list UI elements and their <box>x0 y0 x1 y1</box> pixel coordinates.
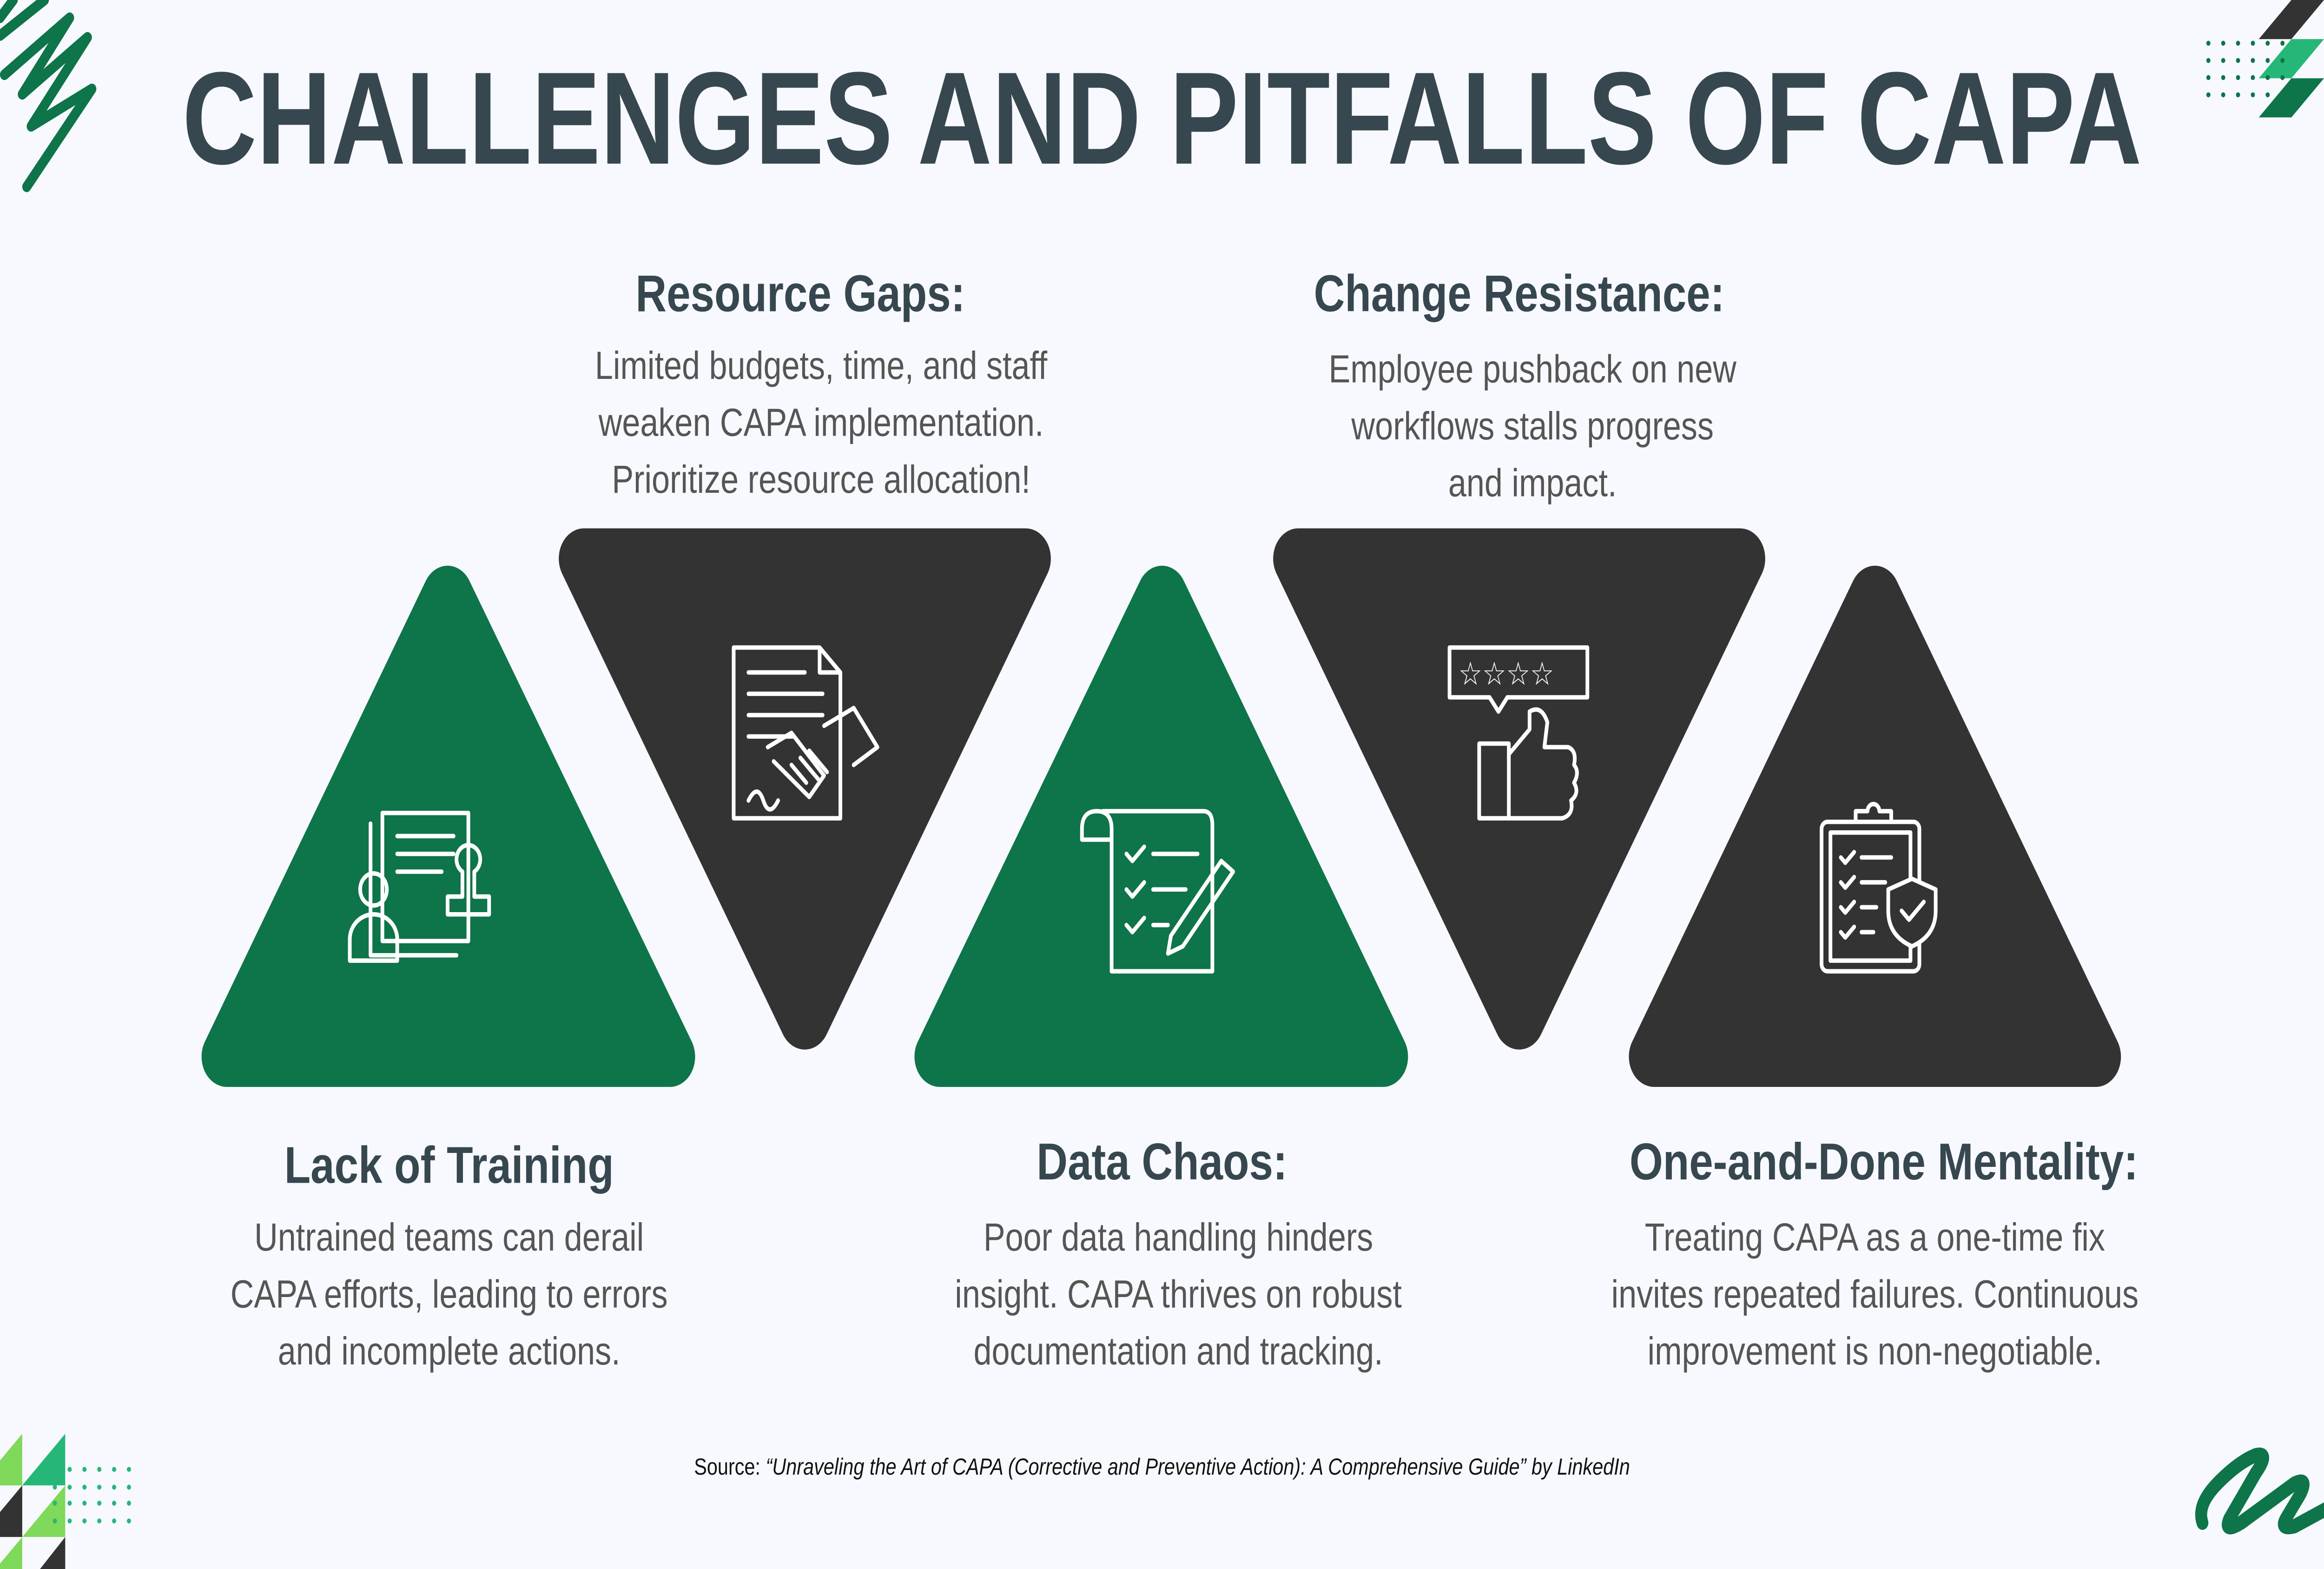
decoration: bottom-left triangles and dots <box>0 1434 131 1569</box>
text block: Data Chaos <box>955 1133 1402 1373</box>
icon: contract handshake <box>733 648 878 818</box>
text block: Lack of Training: Untrained teams can derail <box>254 1216 644 1259</box>
text block: One-and-Done Mentality <box>1611 1133 2139 1373</box>
text block: Change Resistance: workflows stalls progress <box>1351 404 1714 448</box>
text block: Resource Gaps: weaken CAPA implementation. <box>598 401 1043 444</box>
title: CHALLENGES AND PITFALLS OF CAPA <box>182 45 2142 192</box>
text block: Change Resistance: Change Resistance: <box>1314 265 1724 323</box>
text block: Change Resistance: Employee pushback on new <box>1329 348 1737 391</box>
text block: One-and-Done Mentality: invites repeated failures. Continuous <box>1611 1273 2139 1316</box>
text block: Change Resistance: and impact. <box>1448 462 1617 505</box>
icon: clipboard with shield <box>1822 804 1936 971</box>
decoration: top-right parallelograms and dots <box>2206 0 2324 118</box>
text block: Data Chaos: insight. CAPA thrives on robust <box>955 1273 1402 1316</box>
icon: rating with thumbs up: ☆☆☆☆ <box>1459 656 1554 692</box>
panel: triangles <box>227 559 2096 1057</box>
text block: One-and-Done Mentality: Treating CAPA as a one-time fix <box>1645 1216 2105 1259</box>
text block: Resource Gaps <box>595 265 1048 501</box>
text block: One-and-Done Mentality: One-and-Done Mentality: <box>1630 1133 2138 1191</box>
text block: Lack of Training: Lack of Training <box>284 1137 614 1194</box>
text block: Lack of Training: and incomplete actions. <box>278 1330 621 1373</box>
text block: Data Chaos: documentation and tracking. <box>973 1330 1383 1373</box>
decoration: top-left scribble <box>0 0 92 187</box>
text block: Resource Gaps: Resource Gaps: <box>635 265 965 323</box>
text block: Lack of Training: CAPA efforts, leading to errors <box>231 1273 668 1316</box>
text block: One-and-Done Mentality: improvement is non-negotiable. <box>1648 1330 2102 1373</box>
icon: training document with person and stamp <box>350 813 489 960</box>
icon: checklist with pencil <box>1082 811 1233 971</box>
text block: Lack of Training <box>231 1137 668 1373</box>
source footnote: Source: “Unraveling the Art of CAPA (Corrective and Preventive Action): A Comprehensive Guide” by LinkedIn <box>694 1454 1630 1480</box>
text block: Data Chaos: Poor data handling hinders <box>984 1216 1373 1259</box>
text block: Data Chaos: Data Chaos: <box>1037 1133 1287 1191</box>
text block: Resource Gaps: Prioritize resource allocation! <box>612 458 1030 501</box>
text block: Resource Gaps: Limited budgets, time, and staff <box>595 344 1048 388</box>
text block: Change Resistance <box>1314 265 1737 505</box>
decoration: bottom-right scribble <box>2201 1455 2324 1527</box>
icon: rating with thumbs up <box>1450 648 1587 818</box>
